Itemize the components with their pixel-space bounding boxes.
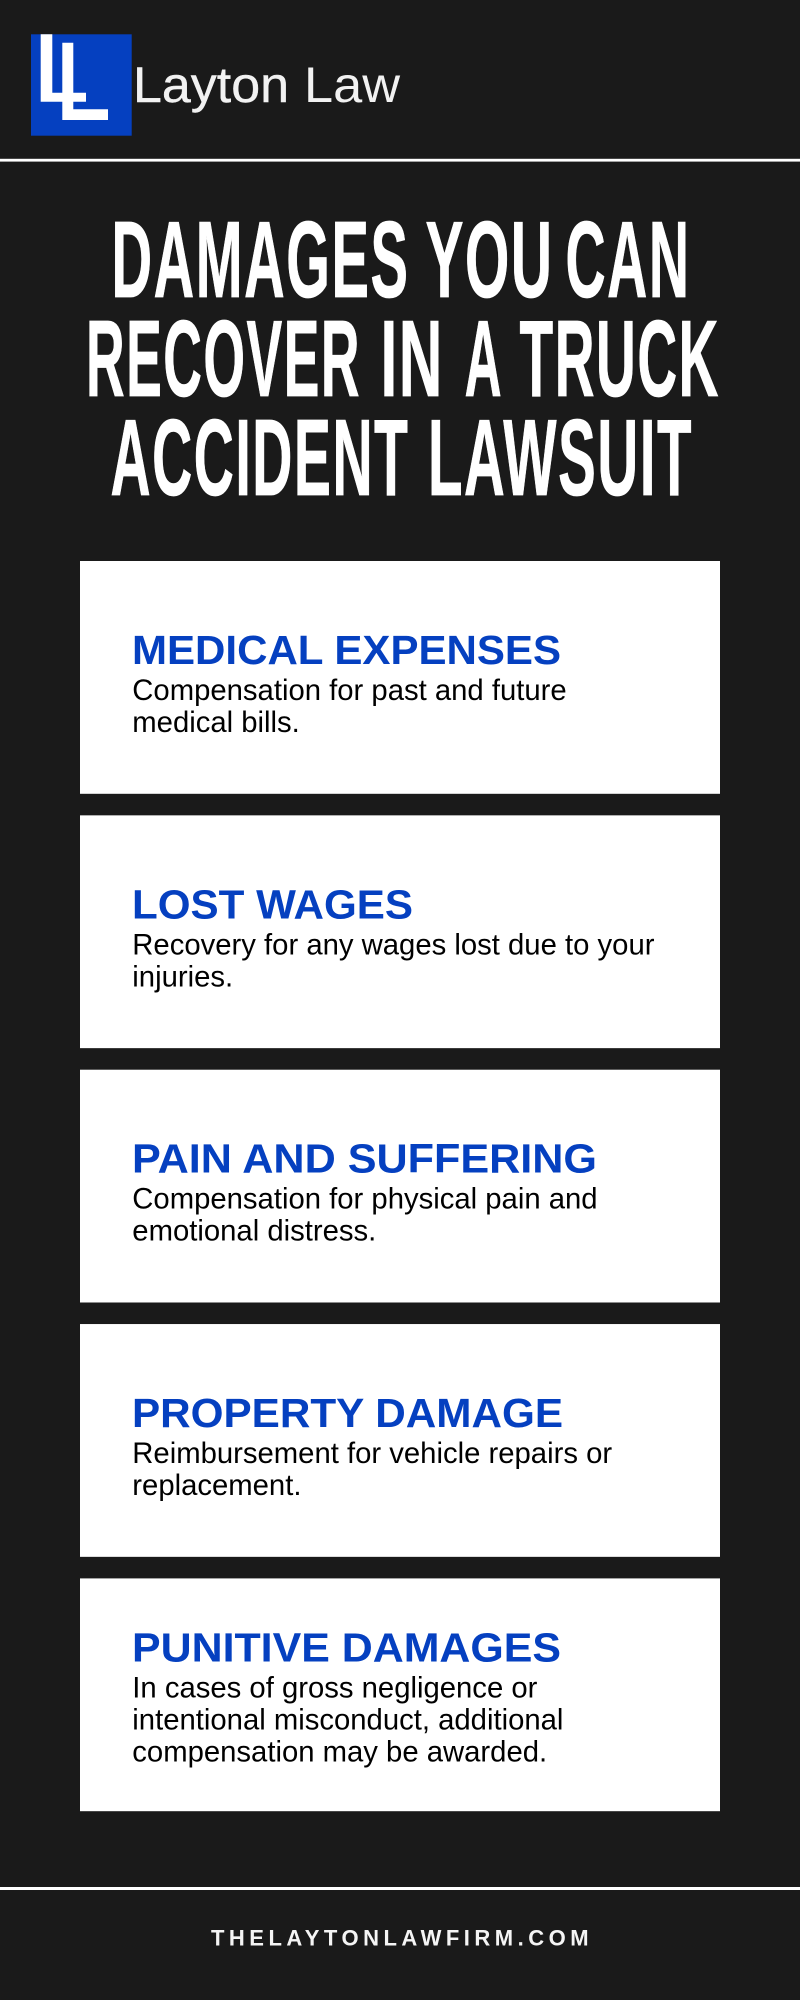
title bbox=[86, 200, 720, 519]
panel: lost wages: injuries. bbox=[132, 961, 233, 993]
panel: punitive damages: compensation may be awarded. bbox=[132, 1737, 547, 1769]
title: A bbox=[465, 299, 503, 420]
title: RECOVER bbox=[86, 299, 361, 420]
panel: medical expenses bbox=[80, 561, 720, 794]
panel: medical expenses: MEDICAL EXPENSES bbox=[132, 627, 561, 673]
header logo bbox=[31, 34, 401, 136]
panel: punitive damages: intentional misconduct, additional bbox=[132, 1705, 563, 1737]
panel: pain and suffering bbox=[80, 1070, 720, 1302]
panel: punitive damages: In cases of gross negligence or bbox=[132, 1673, 538, 1705]
panel: lost wages bbox=[80, 815, 720, 1048]
logo wordmark: Layton bbox=[133, 57, 289, 113]
panel: lost wages: LOST WAGES bbox=[132, 881, 413, 927]
title: ACCIDENT bbox=[110, 398, 409, 519]
title: IN bbox=[380, 299, 444, 420]
title: DAMAGES bbox=[112, 200, 410, 321]
panel: property damage: Reimbursement for vehicle repairs or bbox=[132, 1438, 612, 1470]
panel: property damage: PROPERTY DAMAGE bbox=[132, 1390, 563, 1436]
panel: pain and suffering: Compensation for physical pain and bbox=[132, 1184, 598, 1216]
panel: property damage: replacement. bbox=[132, 1470, 301, 1502]
title: YOU bbox=[426, 200, 554, 321]
panel: pain and suffering: emotional distress. bbox=[132, 1216, 376, 1248]
panel: medical expenses: medical bills. bbox=[132, 707, 300, 739]
footer website: THELAYTONLAWFIRM.COM bbox=[211, 1926, 593, 1950]
panel: property damage bbox=[80, 1324, 720, 1557]
icon: LL logo mark bbox=[31, 34, 132, 136]
logo wordmark: Law bbox=[304, 57, 401, 113]
panel: punitive damages: PUNITIVE DAMAGES bbox=[132, 1625, 561, 1671]
panel: medical expenses: Compensation for past and future bbox=[132, 675, 567, 707]
logo wordmark bbox=[133, 57, 401, 113]
panel: punitive damages bbox=[80, 1578, 720, 1811]
panel: lost wages: Recovery for any wages lost due to your bbox=[132, 929, 655, 961]
panel: pain and suffering: PAIN AND SUFFERING bbox=[132, 1136, 597, 1182]
